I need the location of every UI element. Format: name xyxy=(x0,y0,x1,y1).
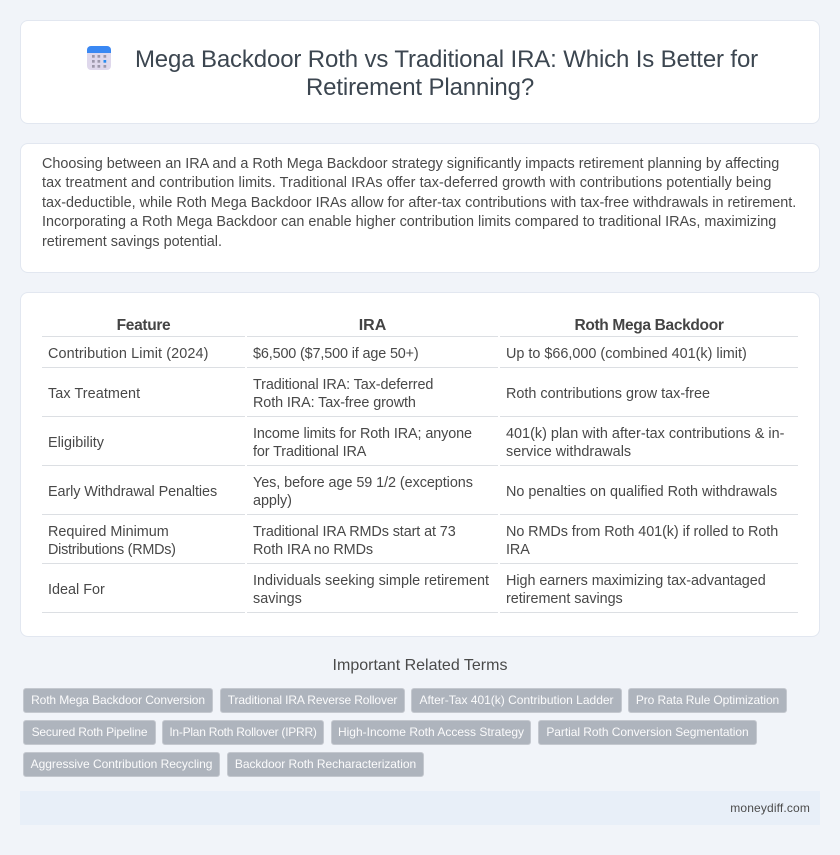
heading: related terms: Important Related Terms xyxy=(333,657,507,674)
table row: contribution limit: $6,500 ($7,500 if age 50+) xyxy=(253,346,419,362)
table row: tax treatment xyxy=(48,377,710,411)
table row: required minimum distributions xyxy=(48,524,778,558)
intro text: tax treatment and contribution limits. Traditional IRAs offer tax-deferred growth with contributions potentially being xyxy=(42,175,772,191)
tag xyxy=(162,720,324,745)
table row: early withdrawal penalties xyxy=(48,475,777,509)
tag: Pro Rata Rule Optimization xyxy=(636,693,779,707)
panel: comparison table: Roth Mega Backdoor xyxy=(574,317,724,334)
table row: required minimum distributions: No RMDs from Roth 401(k) if rolled to Roth xyxy=(506,524,778,540)
tag xyxy=(227,752,424,777)
tag xyxy=(23,688,213,713)
table row: eligibility: service withdrawals xyxy=(506,444,631,460)
tag xyxy=(23,752,220,777)
related term tags xyxy=(23,688,787,777)
table row: ideal for: High earners maximizing tax-advantaged xyxy=(506,573,766,589)
panel: header xyxy=(20,20,820,124)
table row: early withdrawal penalties: apply) xyxy=(253,493,292,509)
intro text: retirement savings potential. xyxy=(42,234,222,250)
intro text: tax-deductible, while Roth Mega Backdoor IRAs allow for after-tax contributions with tax-free withdrawals in retirement. xyxy=(42,195,796,211)
tag xyxy=(628,688,787,713)
table row: eligibility: Income limits for Roth IRA; anyone xyxy=(253,426,472,442)
table row: ideal for xyxy=(48,573,766,607)
table rules xyxy=(42,336,798,613)
intro text: Choosing between an IRA and a Roth Mega Backdoor strategy significantly impacts retirement planning by affecting xyxy=(42,156,779,172)
tag xyxy=(411,688,622,713)
table row: required minimum distributions: Required Minimum xyxy=(48,524,169,540)
table row: early withdrawal penalties: Early Withdrawal Penalties xyxy=(48,484,217,500)
title: Retirement Planning? xyxy=(306,74,534,101)
tag: Roth Mega Backdoor Conversion xyxy=(31,693,205,707)
table row: tax treatment: Tax Treatment xyxy=(48,386,140,402)
table row: contribution limit: Up to $66,000 (combined 401(k) limit) xyxy=(506,346,747,362)
intro text: Incorporating a Roth Mega Backdoor can enable higher contribution limits compared to traditional IRAs, maximizing xyxy=(42,214,776,230)
title: Mega Backdoor Roth vs Traditional IRA: Which Is Better for xyxy=(135,46,758,73)
icon: calendar xyxy=(87,46,111,70)
footer bar xyxy=(20,791,820,825)
table row: contribution limit: Contribution Limit (2024) xyxy=(48,346,209,362)
table row: eligibility xyxy=(48,426,784,460)
table row: eligibility: Eligibility xyxy=(48,435,104,451)
tag: Partial Roth Conversion Segmentation xyxy=(546,725,749,739)
table row: required minimum distributions: Traditional IRA RMDs start at 73 xyxy=(253,524,456,540)
footer brand: moneydiff.com xyxy=(730,801,810,815)
table row: tax treatment: Roth contributions grow tax-free xyxy=(506,386,710,402)
table row: required minimum distributions: Distributions (RMDs) xyxy=(48,542,176,558)
table row: ideal for: Ideal For xyxy=(48,582,105,598)
tag: After-Tax 401(k) Contribution Ladder xyxy=(419,693,614,707)
panel: introduction xyxy=(20,143,820,273)
table row: ideal for: retirement savings xyxy=(506,591,623,607)
table row: early withdrawal penalties: Yes, before age 59 1/2 (exceptions xyxy=(253,475,473,491)
tag: In-Plan Roth Rollover (IPRR) xyxy=(169,725,317,739)
tag xyxy=(220,688,405,713)
table row: contribution limit xyxy=(48,346,747,362)
tag xyxy=(538,720,757,745)
tag xyxy=(23,720,156,745)
table row: required minimum distributions: Roth IRA no RMDs xyxy=(253,542,373,558)
table row: ideal for: Individuals seeking simple retirement xyxy=(253,573,489,589)
tag: Backdoor Roth Recharacterization xyxy=(235,757,416,771)
table row: required minimum distributions: IRA xyxy=(506,542,530,558)
table row: eligibility: for Traditional IRA xyxy=(253,444,366,460)
table row: tax treatment: Traditional IRA: Tax-deferred xyxy=(253,377,433,393)
panel: comparison table xyxy=(20,292,820,637)
table header: Feature xyxy=(117,317,170,334)
tag: Secured Roth Pipeline xyxy=(32,725,147,739)
table row: eligibility: 401(k) plan with after-tax contributions & in- xyxy=(506,426,784,442)
intro text xyxy=(42,156,796,250)
table row: early withdrawal penalties: No penalties on qualified Roth withdrawals xyxy=(506,484,777,500)
tag xyxy=(331,720,531,745)
tag: High-Income Roth Access Strategy xyxy=(338,725,524,739)
table row: tax treatment: Roth IRA: Tax-free growth xyxy=(253,395,416,411)
tag: Aggressive Contribution Recycling xyxy=(31,757,212,771)
tag: Traditional IRA Reverse Rollover xyxy=(228,693,397,707)
panel: comparison table: IRA xyxy=(359,317,386,334)
title xyxy=(135,46,758,101)
table row: ideal for: savings xyxy=(253,591,302,607)
